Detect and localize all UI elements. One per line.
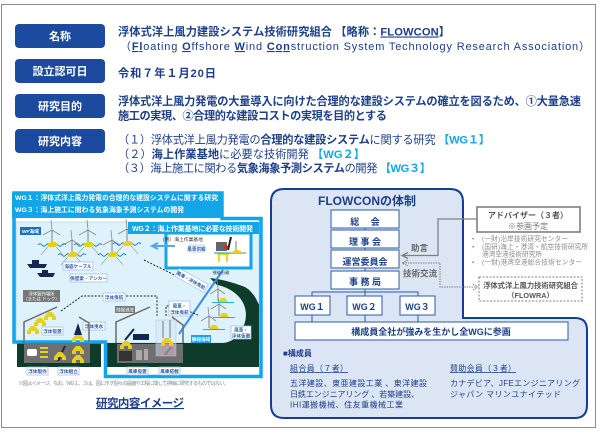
caption: 研究内容イメージ (96, 396, 184, 410)
label: name: 名称 (49, 29, 71, 43)
labels in illustration: 浮体曳航 (170, 309, 189, 316)
advisor list: • (472, 260, 475, 266)
research content list: （３）海上施工に関わる気象海象予測システムの開発 【WG３】 (118, 161, 431, 175)
labels in illustration: 係留索・アンカー (70, 275, 107, 282)
label: research purpose: 研究目的 (38, 99, 82, 113)
blue arrow: WG2 to offshore (152, 243, 175, 249)
panel: FLOWCON organisation (271, 189, 587, 418)
labels in illustration: 静穏海域 (192, 336, 211, 343)
labels in illustration: 浮体曳航 (105, 294, 124, 301)
name text (118, 24, 590, 53)
org labels: WG３ (405, 302, 430, 312)
labels in illustration: 浮体製作場所 (28, 290, 55, 298)
labels in illustration: 浮体曳水 (85, 323, 104, 330)
sea area (16, 222, 259, 343)
panel: research illustration (12, 193, 263, 378)
org labels: 理 事 会 (349, 236, 381, 247)
advisor list: (国研)海上・港湾・航空技術研究所 (482, 242, 588, 251)
FLOWRA box: 浮体式洋上風力技術研究組合 (483, 281, 579, 290)
heading: FLOWCONの体制 (318, 193, 416, 208)
blue arrow: WG2 to port (179, 270, 223, 334)
labels in illustration: 海底ケーブル (64, 263, 92, 270)
research content list: （２）海上作業基地に必要な技術開発 【WG２】 (118, 147, 365, 161)
name text: 浮体式洋上風力建設システム技術研究組合 【略称：FLOWCON】 (118, 24, 450, 38)
org boxes (295, 210, 568, 340)
advisor box: アドバイザー（３者） (488, 210, 568, 220)
connectors (312, 228, 418, 322)
turbines (38, 219, 141, 265)
yard equipment (27, 329, 173, 363)
members list: 日鉄エンジニアリング 、若築建設、 (290, 389, 419, 399)
purpose text: 施工の実現、②合理的な建設コストの実現を目的とする (118, 108, 387, 122)
wind turbine assembly at port (156, 320, 176, 356)
WG1 and WG3 headings: WG１：浮体式洋上風力発電の合理的な建設システムに関する研究 (15, 193, 218, 202)
org labels: 運営委員会 (342, 256, 388, 267)
gray yards (24, 343, 183, 363)
labels in illustration: 風車仮置 (128, 368, 147, 375)
arrow: advice (402, 219, 477, 258)
WG1 and WG3 headings: WG３：海上施工に関わる気象海象予測システムの開発 (15, 205, 184, 214)
WG2 panel: 風車供給 (187, 246, 206, 252)
WF area tag: WF海域 (22, 228, 39, 235)
FLOWRA box (479, 277, 582, 301)
labels in illustration: 風車搭載 (160, 368, 179, 375)
label: established date (15, 59, 105, 83)
supporting members (450, 363, 580, 399)
members list: 五洋建設、東亜建設工業 、東洋建設 (290, 378, 427, 388)
labels in illustration: 風車・浮体曳航 (175, 270, 207, 292)
WG1 and WG3 headings (15, 193, 218, 214)
WG2 panel (128, 222, 259, 268)
labels in illustration (23, 262, 251, 375)
WG2 panel: WG２：海上作業基地に必要な技術開発 (132, 224, 253, 233)
labels in illustration: 浮体組立 (59, 368, 78, 375)
land (17, 278, 259, 367)
advisor box (477, 207, 580, 232)
note: ※図はイメージ。なお、WG１、３は、図に示す個々の設備や工程に関して詳細に研究するものではない。 (18, 379, 229, 387)
labels in illustration: 機能分離 (213, 269, 230, 276)
quiet-sea turbines (201, 280, 235, 330)
members list (290, 363, 427, 410)
label: name (15, 24, 105, 48)
research content list (118, 132, 490, 175)
advisor box: ※参画予定 (508, 221, 548, 231)
labels in illustration: 浮体製作 (28, 368, 47, 375)
label: research content (15, 129, 105, 153)
labels in illustration: 陸揚港湾 (116, 306, 134, 314)
label: research content: 研究内容 (38, 134, 82, 148)
org labels: WG１ (300, 302, 325, 312)
purpose text: 浮体式洋上風力発電の大量導入に向けた合理的な建設システムの確立を図るため、①大量急速 (118, 94, 581, 108)
WG2 panel: (例）海上作業基地 (163, 236, 203, 243)
label: established date: 設立認可日 (32, 64, 88, 78)
supporting members: 賛助会員（３者） (450, 363, 516, 373)
advisor list: (一財)沿岸技術研究センター (482, 234, 568, 243)
floaters (27, 312, 84, 342)
labels in illustration: 風車・ (173, 302, 186, 310)
supporting members: ジャパン マリンユナイテッド (450, 390, 561, 399)
blue frame (14, 193, 261, 376)
established date text: 令和７年１月20日 (118, 66, 216, 80)
arrow: technical exchange: 技術交流 (403, 268, 437, 278)
port structures (24, 307, 183, 343)
research content list: （１）浮体式洋上風力発電の合理的な建設システムに関する研究 【WG１】 (118, 132, 490, 146)
advisor list: 港湾空港技術研究所 (482, 250, 542, 258)
labels in illustration: 浮体仮置 (43, 328, 62, 335)
labels in illustration: 浮体仮置 (232, 332, 251, 340)
FLOWRA box: （FLOWRA） (507, 291, 554, 300)
members list: 組合員（７者） (290, 363, 348, 373)
name text: （Floating Offshore Wind Construction System Technology Research Association） (120, 40, 590, 53)
label: research purpose (15, 94, 105, 118)
members heading: ■構成員 (283, 348, 312, 358)
advisor list (472, 234, 588, 266)
dashed routes (61, 260, 205, 316)
members list: IHI運搬機械、住友重機械工業 (290, 400, 403, 410)
labels in illustration: 風車・ (234, 326, 248, 334)
arrow: technical exchange (402, 260, 478, 290)
org labels (300, 216, 511, 337)
WF area tag (20, 227, 41, 235)
org labels: 構成員全社が強みを生かし全WGに参画 (351, 326, 511, 337)
org labels: WG２ (352, 302, 377, 312)
labels in illustration: （または ドック） (23, 296, 60, 302)
offshore vessels (27, 260, 55, 277)
purpose text (118, 94, 581, 122)
supporting members: カナデビア、JFEエンジニアリング (450, 378, 580, 388)
advisor list: • (472, 236, 475, 243)
advisor list: (一財)港湾空港総合技術センター (482, 258, 582, 266)
arrow: advice: 助言 (411, 243, 429, 253)
advisor list: • (472, 244, 475, 251)
org labels: 事 務 局 (349, 276, 381, 287)
org labels: 総 会 (350, 216, 380, 227)
